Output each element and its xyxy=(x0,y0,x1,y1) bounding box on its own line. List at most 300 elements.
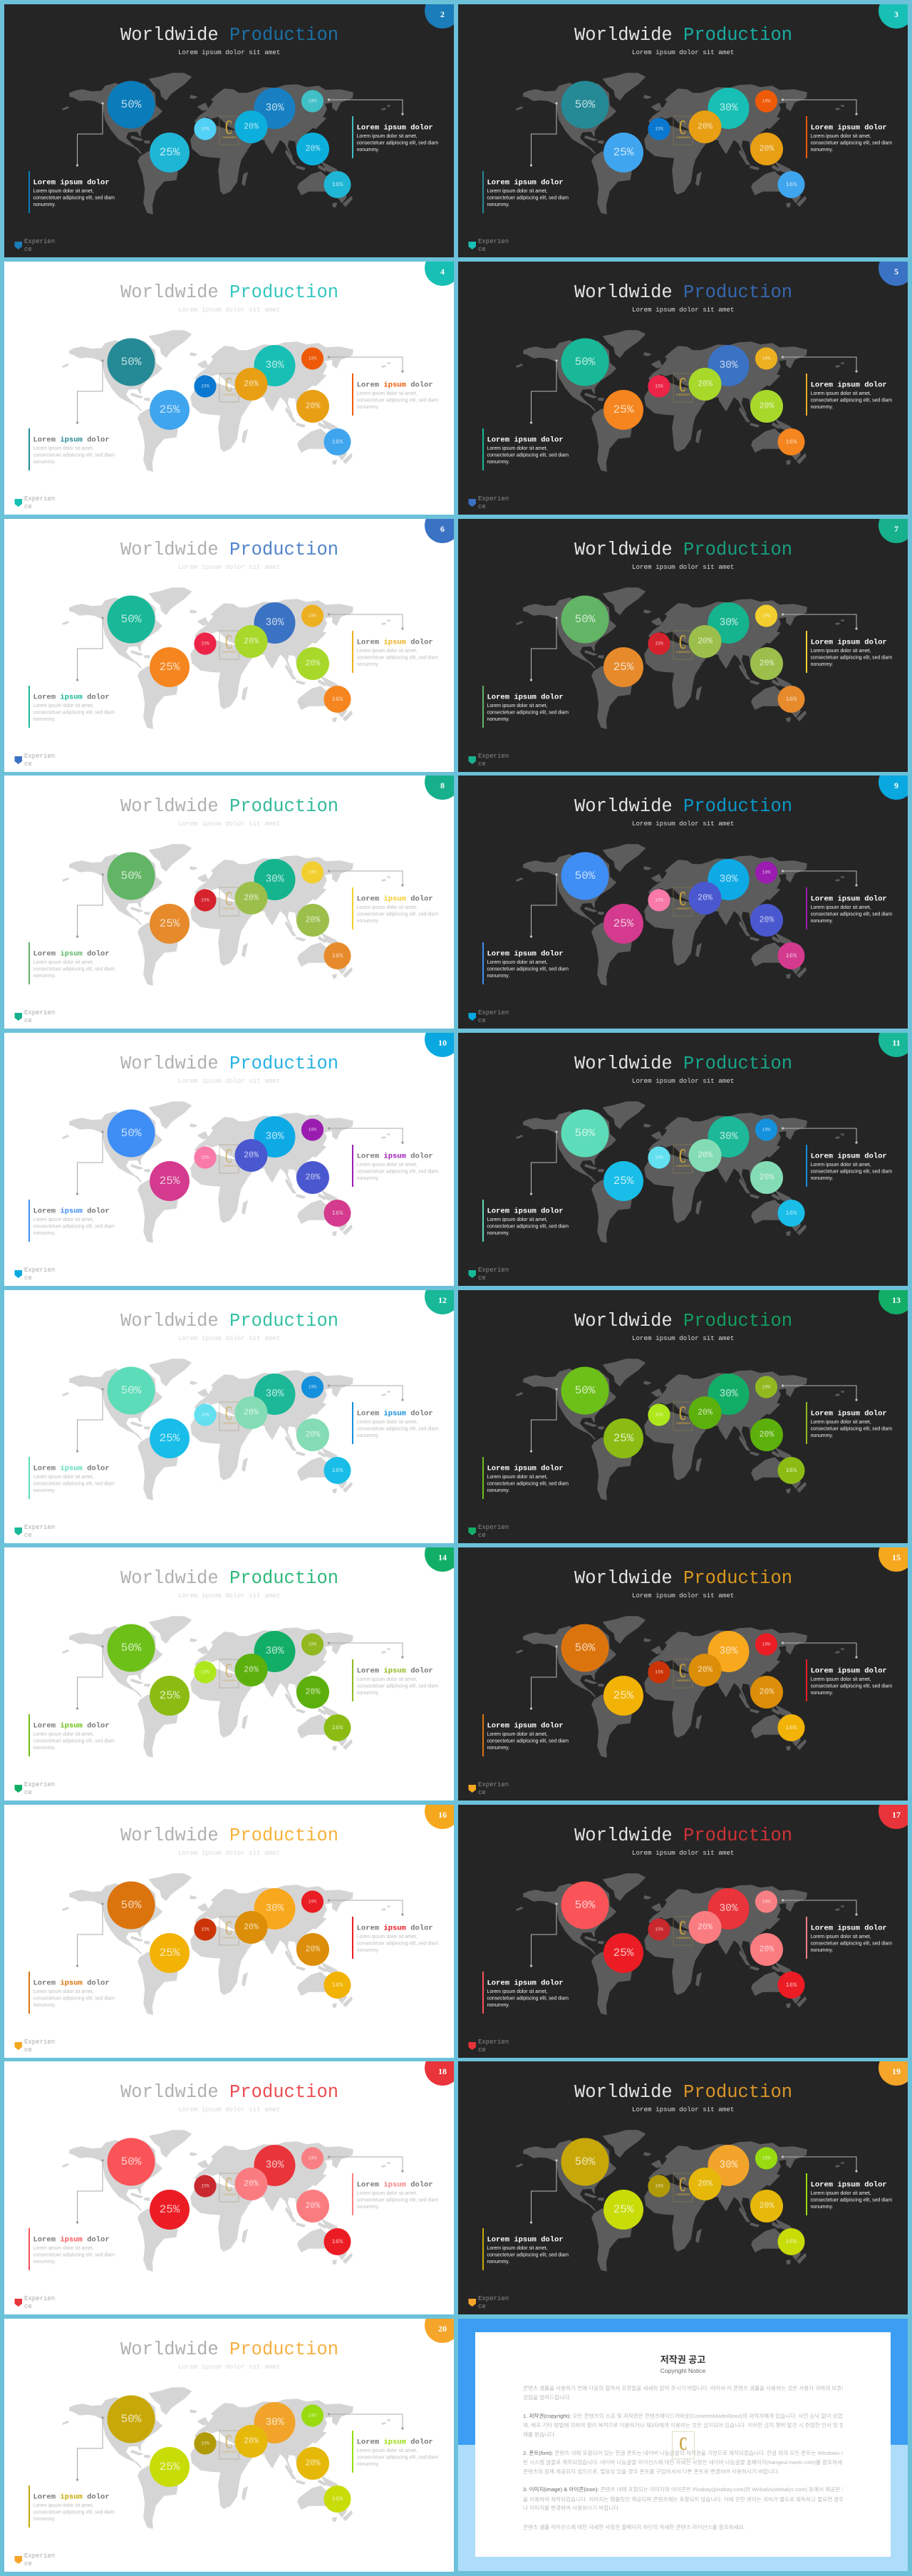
bubble 20%: 20% xyxy=(306,1688,320,1696)
logo watermark: C xyxy=(225,887,232,910)
callout: left xyxy=(482,686,569,728)
logo watermark: CONTENTS xyxy=(222,1937,237,1939)
bubble 15%: 15% xyxy=(201,1669,209,1675)
brand logo: Experien xyxy=(24,753,55,760)
callout: left xyxy=(482,942,569,984)
page badge xyxy=(425,508,460,543)
callout: right: Lorem ipsum dolor sit amet, xyxy=(357,2191,418,2196)
callout: right: consectetuer adipiscing elit, sed diam xyxy=(811,1942,892,1946)
bubble 20% xyxy=(296,2447,329,2480)
callout: left xyxy=(28,1972,115,2014)
bubble 16% xyxy=(778,428,805,455)
logo watermark xyxy=(219,373,239,402)
bubble 16% xyxy=(778,1457,805,1484)
logo watermark xyxy=(219,887,239,916)
brand logo: ce xyxy=(478,1274,486,1282)
bubble 30% xyxy=(708,1888,750,1930)
logo watermark: CONTENTS xyxy=(676,2193,690,2196)
bubble 25% xyxy=(603,1676,643,1716)
bubble 20%: 20% xyxy=(698,123,712,131)
logo watermark xyxy=(219,1917,239,1945)
bubble 20%: 20% xyxy=(244,1923,259,1932)
bubble 16% xyxy=(323,1200,351,1227)
callout: right: consectetuer adipiscing elit, sed diam xyxy=(811,912,892,917)
bubble 20%: 20% xyxy=(698,1665,712,1675)
brand logo: Experien xyxy=(478,1524,509,1531)
bubble 20%: 20% xyxy=(306,659,320,669)
bubble 20%: 20% xyxy=(760,1944,774,1954)
callout: right: Lorem ipsum dolor xyxy=(357,895,433,904)
bubble 30%: 30% xyxy=(265,2160,284,2171)
brand logo: Experien xyxy=(24,1267,55,1274)
callout: left: nonummy. xyxy=(33,460,56,465)
bubble 20% xyxy=(235,2168,268,2200)
bubble 10% xyxy=(301,90,323,113)
logo watermark: C xyxy=(679,2433,688,2454)
brand logo: Experien xyxy=(478,753,509,760)
callout: left: Lorem ipsum dolor xyxy=(33,1979,110,1987)
bubble 10% xyxy=(301,861,323,884)
callout: right: Lorem ipsum dolor xyxy=(357,381,433,389)
bubble 16%: 16% xyxy=(786,1210,797,1217)
page badge: 3 xyxy=(894,9,898,19)
bubble 25%: 25% xyxy=(613,2203,634,2216)
callout: right: Lorem ipsum dolor xyxy=(811,2181,887,2190)
world map xyxy=(517,2131,844,2271)
logo watermark xyxy=(219,1402,239,1431)
title: Worldwide Production xyxy=(574,540,792,560)
callout: left: nonummy. xyxy=(33,974,56,979)
subtitle: Lorem ipsum dolor sit amet xyxy=(178,306,280,314)
callout: left xyxy=(482,1457,569,1499)
callout: right: consectetuer adipiscing elit, sed diam xyxy=(811,1684,892,1689)
subtitle: Lorem ipsum dolor sit amet xyxy=(632,306,734,314)
notice card: 콘텐츠와 함께 제공되지 않으므로, 필요성 있을 경우 폰트를 구입하셔서 다른 폰트로 변경하여 사용하시기 바랍니다. xyxy=(523,2468,779,2475)
callout: left: consectetuer adipiscing elit, sed diam xyxy=(487,710,569,716)
callout: left: Lorem ipsum dolor xyxy=(487,693,564,701)
callout: left: Lorem ipsum dolor xyxy=(487,436,564,445)
callout: left: Lorem ipsum dolor sit amet, xyxy=(487,2246,548,2251)
bubble 10% xyxy=(301,1890,323,1913)
connector: left xyxy=(530,617,558,681)
bubble 16% xyxy=(323,1972,351,1999)
connector: left xyxy=(76,2159,104,2224)
bubble 50% xyxy=(561,1882,608,1929)
callout: right xyxy=(806,2173,892,2215)
callout: left xyxy=(28,2485,115,2528)
panel: slide 17 xyxy=(458,1805,908,2058)
callout: left: nonummy. xyxy=(487,2260,509,2265)
callout: left: nonummy. xyxy=(487,1746,509,1751)
callout: left: Lorem ipsum dolor xyxy=(33,1207,110,1216)
bubble 50%: 50% xyxy=(121,1384,142,1397)
callout: left: consectetuer adipiscing elit, sed diam xyxy=(487,967,569,972)
callout: left: Lorem ipsum dolor sit amet, xyxy=(487,1217,548,1222)
callout: left: consectetuer adipiscing elit, sed diam xyxy=(33,2510,115,2515)
world map xyxy=(63,2131,390,2271)
logo watermark: C xyxy=(225,373,232,396)
callout: right xyxy=(352,887,438,929)
bubble 30%: 30% xyxy=(719,1389,738,1400)
panel: slide 2 xyxy=(4,4,454,257)
logo watermark: C xyxy=(225,2173,232,2195)
callout: left: nonummy. xyxy=(487,1231,509,1236)
callout: left xyxy=(28,942,115,984)
connector: right xyxy=(782,613,858,630)
logo watermark xyxy=(673,887,693,916)
callout: left: Lorem ipsum dolor sit amet, xyxy=(33,1475,94,1480)
world map xyxy=(63,1102,390,1242)
brand logo xyxy=(469,1267,509,1282)
bubble 16%: 16% xyxy=(786,181,797,188)
bubble 25%: 25% xyxy=(613,1432,634,1445)
title: Worldwide Production xyxy=(120,2339,338,2360)
bubble 20% xyxy=(235,1654,268,1686)
bubble 10% xyxy=(755,861,777,884)
bubble 30% xyxy=(254,1374,295,1415)
callout: right: Lorem ipsum dolor sit amet, xyxy=(357,1420,418,1425)
title: Worldwide Production xyxy=(120,1311,338,1331)
bubble 30%: 30% xyxy=(265,2417,284,2428)
bubble 30%: 30% xyxy=(265,103,284,114)
bubble 10%: 10% xyxy=(309,356,316,361)
bubble 15% xyxy=(194,375,217,398)
callout: left: nonummy. xyxy=(33,1746,56,1751)
bubble 25%: 25% xyxy=(160,1689,180,1702)
bubble 20%: 20% xyxy=(244,1665,259,1675)
callout: left: Lorem ipsum dolor sit amet, xyxy=(33,189,94,194)
connector: left xyxy=(530,1388,558,1453)
connector: right xyxy=(782,98,858,115)
panel: slide 7 xyxy=(458,519,908,772)
bubble 15%: 15% xyxy=(655,1927,663,1932)
subtitle: Lorem ipsum dolor sit amet xyxy=(632,1334,734,1342)
callout: right: nonummy. xyxy=(357,405,379,410)
brand logo: ce xyxy=(24,761,32,768)
callout: right: Lorem ipsum dolor xyxy=(811,1152,887,1160)
bubble 10%: 10% xyxy=(309,1128,316,1132)
bubble 30% xyxy=(254,345,295,386)
callout: right: Lorem ipsum dolor xyxy=(811,895,887,904)
title: Worldwide Production xyxy=(574,1825,792,1846)
connector: right xyxy=(328,2155,404,2173)
title: Worldwide Production xyxy=(574,2082,792,2103)
notice card: 재를 받습니다. xyxy=(523,2431,556,2438)
callout: right: consectetuer adipiscing elit, sed diam xyxy=(811,141,892,145)
callout: right: nonummy. xyxy=(811,1691,833,1696)
connector: left xyxy=(76,617,104,681)
subtitle: Lorem ipsum dolor sit amet xyxy=(632,1077,734,1085)
connector: right xyxy=(782,1642,858,1659)
bubble 20%: 20% xyxy=(760,1430,774,1440)
bubble 20% xyxy=(750,904,783,937)
brand logo: ce xyxy=(478,2303,486,2310)
callout: right: nonummy. xyxy=(357,2462,379,2467)
bubble 15%: 15% xyxy=(655,383,663,389)
bubble 20% xyxy=(235,625,268,658)
callout: left: Lorem ipsum dolor xyxy=(33,1722,110,1731)
bubble 20%: 20% xyxy=(698,2180,712,2188)
callout: left: consectetuer adipiscing elit, sed diam xyxy=(33,710,115,716)
bubble 16%: 16% xyxy=(332,1724,343,1731)
bubble 20% xyxy=(750,647,783,680)
bubble 20%: 20% xyxy=(760,402,774,411)
bubble 50%: 50% xyxy=(121,2413,142,2426)
brand logo xyxy=(469,2039,509,2054)
bubble 20%: 20% xyxy=(244,1150,259,1160)
notice card: 것임을 알려드립니다. xyxy=(523,2394,571,2401)
bubble 50%: 50% xyxy=(121,1642,142,1654)
bubble 16%: 16% xyxy=(786,438,797,445)
bubble 10% xyxy=(301,2147,323,2170)
bubble 30% xyxy=(254,1888,295,1930)
callout: left: Lorem ipsum dolor sit amet, xyxy=(33,1989,94,1994)
callout: left: Lorem ipsum dolor xyxy=(33,2235,110,2244)
bubble 10% xyxy=(755,1118,777,1141)
brand logo: Experien xyxy=(478,238,509,245)
callout: right: consectetuer adipiscing elit, sed diam xyxy=(357,1169,438,1175)
bubble 25%: 25% xyxy=(160,917,180,930)
bubble 10% xyxy=(755,1633,777,1656)
callout: right: nonummy. xyxy=(357,1691,379,1696)
bubble 10% xyxy=(301,2404,323,2427)
callout: right: Lorem ipsum dolor xyxy=(357,124,433,133)
notice card: 나 이미지를 변경하여 사용하시기 바랍니다. xyxy=(523,2505,620,2511)
callout: right: Lorem ipsum dolor xyxy=(811,1666,887,1675)
bubble 20% xyxy=(235,1396,268,1429)
bubble 20% xyxy=(296,904,329,937)
panel: copyright notice xyxy=(458,2319,908,2571)
bubble 30%: 30% xyxy=(719,1131,738,1143)
bubble 10%: 10% xyxy=(309,2413,316,2418)
bubble 10% xyxy=(301,347,323,370)
bubble 25% xyxy=(150,1933,190,1973)
callout: right: Lorem ipsum dolor xyxy=(357,1666,433,1675)
logo watermark: C xyxy=(225,1917,232,1939)
bubble 16%: 16% xyxy=(332,438,343,445)
bubble 20%: 20% xyxy=(698,1150,712,1160)
page badge: 17 xyxy=(892,1810,901,1820)
bubble 30% xyxy=(708,1116,750,1158)
bubble 15% xyxy=(648,1146,670,1169)
callout: right: Lorem ipsum dolor xyxy=(811,639,887,647)
logo watermark xyxy=(219,2173,239,2202)
bubble 20% xyxy=(688,1911,721,1944)
bubble 20%: 20% xyxy=(244,2180,259,2188)
callout: left: nonummy. xyxy=(487,974,509,979)
bubble 25% xyxy=(603,1418,643,1458)
callout: left: consectetuer adipiscing elit, sed diam xyxy=(487,1225,569,1229)
panel: slide 19 xyxy=(458,2061,908,2314)
callout: right xyxy=(806,373,892,416)
callout: right xyxy=(806,631,892,673)
logo watermark xyxy=(673,1659,693,1688)
bubble 20% xyxy=(688,368,721,401)
bubble 30%: 30% xyxy=(265,360,284,371)
callout: right xyxy=(352,631,438,673)
callout: left xyxy=(482,1972,569,2014)
bubble 15%: 15% xyxy=(201,127,209,131)
bubble 16% xyxy=(323,1457,351,1484)
bubble 25%: 25% xyxy=(613,1175,634,1187)
callout: right: nonummy. xyxy=(357,1948,379,1953)
world map xyxy=(63,588,390,728)
callout: left: nonummy. xyxy=(33,2260,56,2265)
callout: left: Lorem ipsum dolor sit amet, xyxy=(33,960,94,965)
callout: right xyxy=(352,1145,438,1187)
callout: right: consectetuer adipiscing elit, sed diam xyxy=(811,656,892,660)
bubble 16%: 16% xyxy=(786,952,797,959)
title: Worldwide Production xyxy=(120,1568,338,1589)
callout: left: nonummy. xyxy=(487,202,509,207)
logo watermark: CONTENTS xyxy=(676,1165,690,1168)
world map xyxy=(63,1359,390,1500)
bubble 50%: 50% xyxy=(575,1127,596,1140)
brand logo xyxy=(14,238,55,253)
bubble 10%: 10% xyxy=(762,1384,770,1390)
bubble 30% xyxy=(254,2145,295,2186)
subtitle: Lorem ipsum dolor sit amet xyxy=(178,1077,280,1085)
bubble 16%: 16% xyxy=(332,1467,343,1474)
bubble 50%: 50% xyxy=(121,870,142,882)
bubble 50% xyxy=(561,338,608,386)
logo watermark: CONTENTS xyxy=(676,1679,690,1682)
bubble 15% xyxy=(648,1403,670,1426)
logo watermark xyxy=(672,2431,695,2459)
page badge xyxy=(425,764,460,800)
bubble 15% xyxy=(194,632,217,655)
callout: right: Lorem ipsum dolor sit amet, xyxy=(357,134,418,139)
logo watermark xyxy=(219,116,239,145)
callout: right xyxy=(352,373,438,416)
connector: right xyxy=(782,1899,858,1916)
logo watermark: CONTENTS xyxy=(676,136,690,139)
connector: left xyxy=(76,1130,104,1195)
bubble 20% xyxy=(235,110,268,143)
connector: left xyxy=(76,1645,104,1710)
callout: right: Lorem ipsum dolor sit amet, xyxy=(811,649,871,654)
callout: left: nonummy. xyxy=(33,1231,56,1236)
bubble 10% xyxy=(755,1376,777,1398)
world map xyxy=(517,1617,844,1757)
panel: slide 20 xyxy=(4,2319,454,2572)
connector: left xyxy=(530,1645,558,1710)
bubble 20%: 20% xyxy=(306,2459,320,2468)
bubble 15%: 15% xyxy=(655,2184,663,2188)
callout: right: Lorem ipsum dolor xyxy=(357,1925,433,1933)
bubble 20% xyxy=(688,1654,721,1686)
callout: left: nonummy. xyxy=(33,2517,56,2522)
brand logo xyxy=(14,1781,55,1796)
bubble 20% xyxy=(235,882,268,915)
connector: left xyxy=(530,102,558,167)
bubble 20%: 20% xyxy=(306,1173,320,1182)
callout: left: Lorem ipsum dolor xyxy=(33,178,110,187)
callout: right xyxy=(352,1917,438,1959)
logo watermark: CONTENTS xyxy=(676,1422,690,1425)
bubble 15%: 15% xyxy=(201,642,209,646)
callout: left: nonummy. xyxy=(487,460,509,465)
bubble 30%: 30% xyxy=(719,874,738,885)
world map xyxy=(63,1617,390,1757)
bubble 10%: 10% xyxy=(309,1384,316,1390)
bubble 15%: 15% xyxy=(655,642,663,646)
bubble 16%: 16% xyxy=(332,2238,343,2245)
panel: slide 6 xyxy=(4,519,454,772)
brand logo: Experien xyxy=(478,1781,509,1788)
title: Worldwide Production xyxy=(574,1053,792,1074)
logo watermark xyxy=(673,631,693,659)
callout: left: nonummy. xyxy=(487,2003,509,2008)
bubble 20% xyxy=(296,1161,329,1194)
world map xyxy=(63,2388,390,2528)
brand logo: ce xyxy=(478,503,486,510)
bubble 30% xyxy=(708,1631,750,1672)
bubble 10%: 10% xyxy=(309,98,316,104)
panel: slide 11 xyxy=(458,1033,908,1286)
page badge: 2 xyxy=(440,9,445,19)
bubble 50%: 50% xyxy=(121,613,142,626)
page badge xyxy=(425,250,460,286)
page badge: 20 xyxy=(438,2324,447,2334)
bubble 15% xyxy=(194,1918,217,1941)
logo watermark: CONTENTS xyxy=(222,651,237,654)
callout: left: Lorem ipsum dolor xyxy=(487,2235,564,2244)
panel: slide 5 xyxy=(458,262,908,515)
logo watermark: CONTENTS xyxy=(676,907,690,910)
callout: left: Lorem ipsum dolor xyxy=(487,949,564,958)
world map xyxy=(517,588,844,728)
bubble 25%: 25% xyxy=(160,1947,180,1959)
page badge xyxy=(879,1536,912,1572)
bubble 20%: 20% xyxy=(244,379,259,389)
bubble 20% xyxy=(688,1139,721,1172)
callout: right: consectetuer adipiscing elit, sed diam xyxy=(811,1427,892,1431)
callout: right: nonummy. xyxy=(811,2205,833,2210)
callout: left xyxy=(28,171,115,213)
bubble 16% xyxy=(323,428,351,455)
connector: left xyxy=(76,1902,104,1967)
callout: left: consectetuer adipiscing elit, sed diam xyxy=(33,195,115,201)
bubble 25% xyxy=(150,647,190,687)
page badge: 9 xyxy=(894,780,898,790)
callout: right: consectetuer adipiscing elit, sed diam xyxy=(357,2455,438,2461)
bubble 50% xyxy=(107,852,155,900)
brand logo xyxy=(469,753,509,768)
notice card xyxy=(475,2332,891,2557)
connector: left xyxy=(76,1388,104,1453)
bubble 16% xyxy=(778,2228,805,2255)
bubble 20%: 20% xyxy=(698,894,712,902)
brand logo: Experien xyxy=(24,238,55,245)
panel: slide 16 xyxy=(4,1805,454,2058)
brand logo: ce xyxy=(24,1789,32,1796)
subtitle: Lorem ipsum dolor sit amet xyxy=(632,563,734,571)
callout: left: consectetuer adipiscing elit, sed diam xyxy=(33,1481,115,1487)
bubble 30%: 30% xyxy=(265,1389,284,1400)
bubble 15% xyxy=(648,2175,670,2198)
bubble 20%: 20% xyxy=(306,1944,320,1954)
bubble 16% xyxy=(323,2485,351,2513)
bubble 20%: 20% xyxy=(306,402,320,411)
bubble 10% xyxy=(755,604,777,627)
callout: left: consectetuer adipiscing elit, sed diam xyxy=(33,2252,115,2258)
callout: right: nonummy. xyxy=(811,1176,833,1181)
bubble 25%: 25% xyxy=(160,146,180,159)
page badge: 12 xyxy=(438,1295,447,1305)
brand logo: Experien xyxy=(478,1267,509,1274)
world map xyxy=(63,845,390,985)
